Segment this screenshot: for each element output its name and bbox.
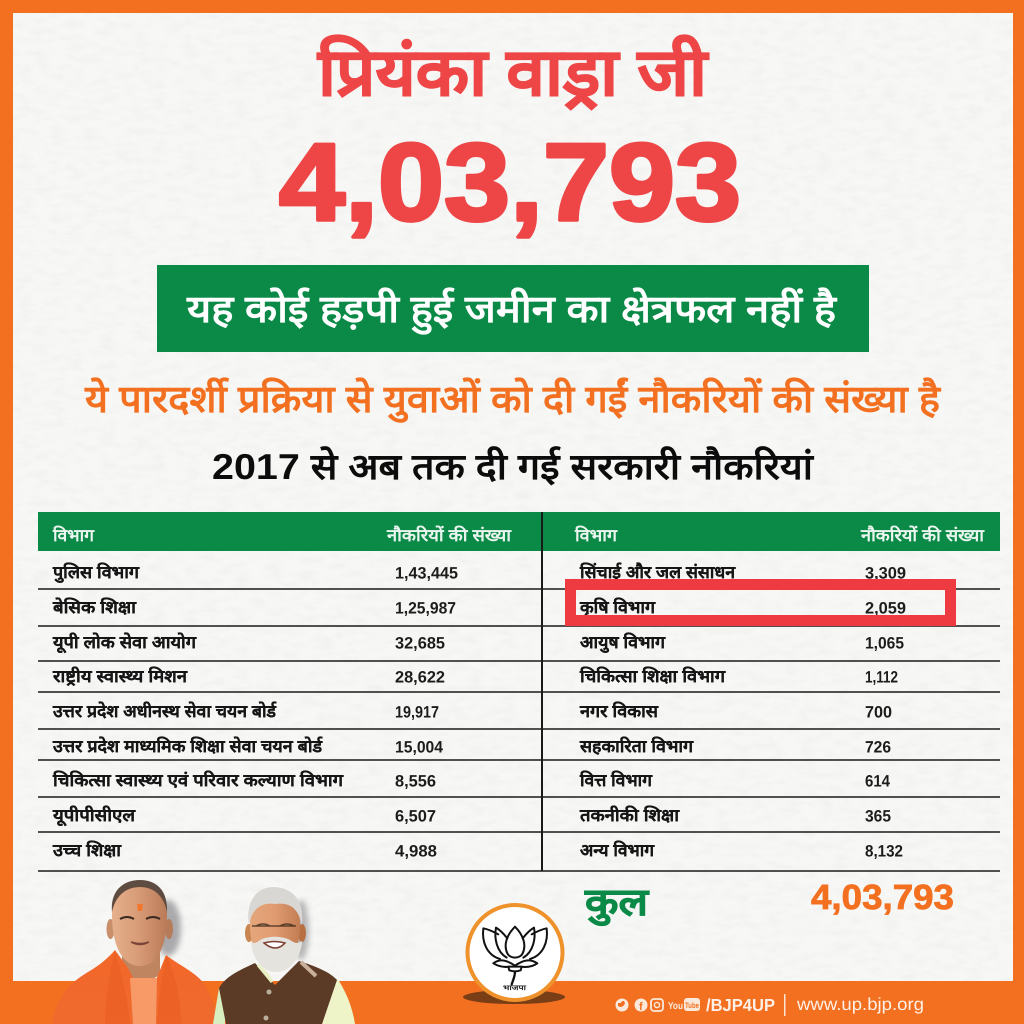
- row: agriculture: कृषि विभाग: [579, 597, 656, 618]
- right column rows: [579, 562, 906, 860]
- row: irrigation: 3,309: [865, 564, 906, 582]
- website: www.up.bjp.org: [796, 994, 924, 1014]
- row: medical health: चिकित्सा स्वास्थ्य एवं परिवार कल्याण विभाग: [52, 770, 345, 790]
- row: finance: 614: [865, 772, 891, 790]
- table header bar: नौकरियों की संख्या: [386, 525, 512, 545]
- row: UPSSSC: 19,917: [395, 704, 439, 722]
- row: UPPSC: [52, 632, 445, 654]
- row: ayush: आयुष विभाग: [580, 632, 666, 653]
- portrait: saffron-robed leader: [52, 880, 218, 1024]
- total label: कुल: [584, 882, 649, 926]
- icon: instagram: [651, 999, 663, 1011]
- row: urban development: 700: [865, 704, 892, 722]
- face: [112, 881, 167, 966]
- row: medical education: चिकित्सा शिक्षा विभाग: [579, 666, 727, 686]
- row: cooperative: सहकारिता विभाग: [579, 736, 694, 756]
- row: other departments: [580, 840, 903, 860]
- row: cooperative: 726: [865, 738, 891, 756]
- row: finance: [579, 770, 891, 790]
- row: basic education: बेसिक शिक्षा: [52, 597, 137, 617]
- smile: [264, 942, 285, 948]
- icon: twitter: [616, 998, 628, 1012]
- vest: [219, 961, 337, 1024]
- total value: 4,03,793: [811, 878, 954, 917]
- row: UPPCL: [52, 805, 436, 827]
- row: medical education: 1,112: [865, 668, 898, 686]
- table header bar: नौकरियों की संख्या: [860, 525, 985, 545]
- row: police: [52, 562, 458, 583]
- icon: facebook: [634, 998, 648, 1013]
- row: police: पुलिस विभाग: [52, 562, 140, 583]
- icon: youtube: [668, 998, 700, 1012]
- row: medical education: [579, 666, 898, 686]
- ears: [106, 919, 114, 939]
- row: technical education: तकनीकी शिक्षा: [579, 805, 680, 825]
- row: urban development: नगर विकास: [579, 701, 660, 721]
- row: higher education: उच्च शिक्षा: [52, 840, 122, 860]
- row: secondary education board: उत्तर प्रदेश माध्यमिक शिक्षा सेवा चयन बोर्ड: [52, 736, 323, 756]
- logo caption: भाजपा: [503, 985, 528, 992]
- black subheading: 2017 से अब तक दी गई सरकारी नौकरियां: [212, 446, 815, 487]
- glasses: [252, 924, 296, 926]
- icon: youtube: Tube: [685, 1001, 699, 1010]
- beard: [251, 937, 302, 972]
- portrait: leader with white beard: [213, 887, 355, 1024]
- red highlight box: [570, 584, 950, 620]
- row: medical health: [52, 770, 436, 790]
- row: ayush: 1,065: [865, 634, 904, 652]
- face: [250, 895, 300, 966]
- hair: [248, 887, 302, 925]
- divider: [784, 994, 786, 1016]
- row: secondary education board: [52, 736, 444, 756]
- row: UPPCL: यूपीपीसीएल: [52, 805, 137, 827]
- row: cooperative: [579, 736, 891, 756]
- buttons: [266, 990, 272, 994]
- row: irrigation: [579, 562, 906, 582]
- row: UPSSSC: [52, 701, 439, 722]
- BJP lotus logo: [463, 905, 565, 1004]
- icon: youtube: You: [668, 1001, 683, 1012]
- big number: 4,03,793: [279, 121, 741, 244]
- eyes and mouth: [120, 917, 160, 919]
- row: NHM: 28,622: [395, 668, 445, 686]
- row: police: 1,43,445: [395, 564, 458, 582]
- green banner: यह कोई हड़पी हुई जमीन का क्षेत्रफल नहीं है: [186, 287, 838, 335]
- title: name: प्रियंका वाड्रा जी: [316, 34, 710, 111]
- row: basic education: [52, 597, 456, 618]
- row: ayush: [580, 632, 904, 653]
- row: NHM: [52, 666, 445, 686]
- icon: facebook: f: [639, 1001, 643, 1013]
- row: technical education: 365: [865, 808, 891, 826]
- row: NHM: राष्ट्रीय स्वास्थ्य मिशन: [52, 666, 188, 686]
- row: UPPCL: 6,507: [395, 808, 436, 826]
- ears: [245, 924, 253, 942]
- row: UPSSSC: उत्तर प्रदेश अधीनस्थ सेवा चयन बोर्ड: [52, 701, 277, 721]
- handle: /BJP4UP: [706, 995, 775, 1015]
- table header bar: विभाग: [574, 525, 619, 545]
- row: technical education: [579, 805, 891, 826]
- row: secondary education board: 15,004: [395, 738, 444, 756]
- row: other departments: 8,132: [865, 842, 903, 860]
- robe: [52, 950, 218, 1024]
- row: UPPSC: 32,685: [395, 634, 445, 652]
- jobs table: [38, 512, 1000, 871]
- row: agriculture: 2,059: [865, 600, 906, 618]
- row: UPPSC: यूपी लोक सेवा आयोग: [52, 632, 198, 654]
- icon: lotus: [483, 927, 547, 984]
- tilak: [137, 904, 143, 911]
- sleeves: [213, 985, 225, 1024]
- table header bar: विभाग: [52, 525, 95, 545]
- orange subheading: ये पारदर्शी प्रक्रिया से युवाओं को दी गईं नौकरियों की संख्या है: [84, 377, 942, 423]
- left column rows: [52, 562, 458, 860]
- row: irrigation: सिंचाई और जल संसाधन: [579, 562, 736, 582]
- row: finance: वित्त विभाग: [579, 770, 653, 790]
- row: basic education: 1,25,987: [395, 600, 456, 618]
- table rules: [38, 512, 1000, 871]
- row: other departments: अन्य विभाग: [580, 840, 655, 860]
- row: medical health: 8,556: [395, 772, 436, 790]
- table header bar: [38, 512, 1000, 551]
- green banner: [157, 265, 869, 352]
- row: agriculture: [579, 597, 906, 618]
- social icons and handle: [616, 994, 924, 1016]
- row: urban development: [579, 701, 892, 722]
- row: higher education: 4,988: [395, 842, 437, 860]
- row: higher education: [52, 840, 437, 860]
